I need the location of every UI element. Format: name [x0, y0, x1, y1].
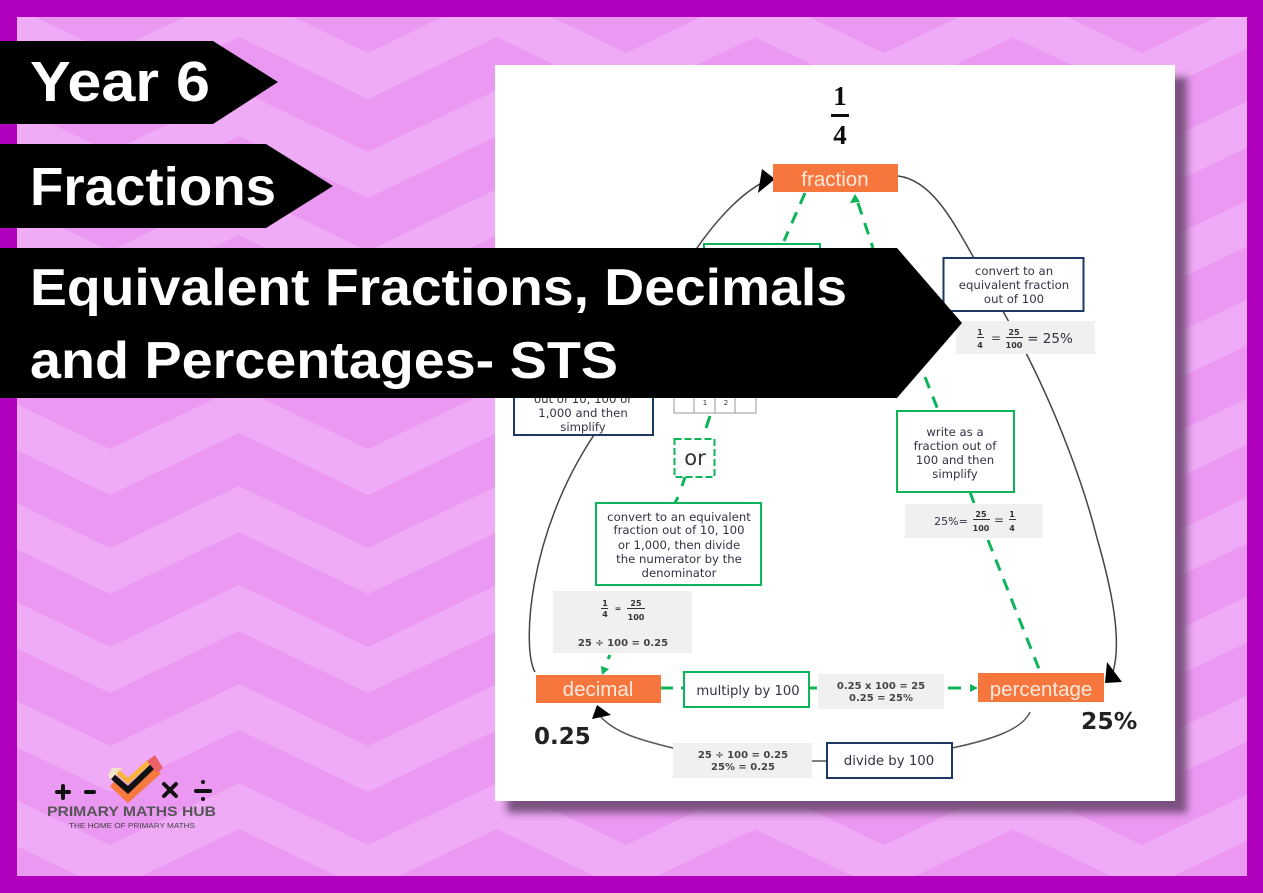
navy box: convert to equivalent fraction out of 100: out of 100	[984, 292, 1044, 306]
fraction one quarter	[831, 81, 849, 150]
green box: convert then divide: denominator	[642, 566, 717, 580]
green box: write as a fraction out of 100: simplify	[932, 467, 978, 481]
grey working: percentage to fraction: 25	[975, 510, 987, 519]
logo: Primary Maths Hub	[47, 755, 216, 830]
navy box: convert to equivalent fraction out of 10, 100 or 1,000	[514, 370, 653, 435]
banner: main title	[0, 248, 962, 398]
partly hidden green box	[704, 244, 820, 264]
grey working: fraction to decimal: 4	[602, 610, 608, 619]
icon: plus minus times divide	[57, 780, 210, 801]
small place value table: 1	[703, 399, 707, 407]
green box: write as a fraction out of 100: fraction out of	[914, 439, 997, 453]
grey working: percentage to decimal	[673, 743, 812, 778]
node: decimal: decimal	[563, 678, 633, 701]
grey working: decimal to percentage: 0.25 x 100 = 25	[837, 681, 925, 692]
navy box: convert to equivalent fraction out of 100: convert to an	[975, 264, 1053, 278]
navy box: convert to equivalent fraction out of 10, 100 or 1,000: simplify	[560, 420, 606, 434]
dashed box: or: or	[684, 446, 706, 470]
grey working: decimal to percentage	[818, 674, 944, 709]
banner: main title: Equivalent Fractions, Decimals	[30, 259, 847, 317]
grey working: fraction to percentage: 25	[1008, 328, 1020, 337]
grey working: percentage to fraction	[905, 504, 1043, 538]
node: decimal	[536, 675, 661, 703]
curved arrow: percentage to decimal	[592, 705, 1030, 761]
banner: Year 6	[0, 41, 278, 124]
fraction one quarter: 4	[833, 120, 847, 150]
grey working: fraction to percentage: 100	[1006, 341, 1023, 350]
banner: Year 6: Year 6	[30, 50, 210, 114]
grey working: decimal to percentage: 0.25 = 25%	[849, 693, 913, 704]
grey working: fraction to percentage: 4	[977, 341, 983, 350]
value: 25%: 25%	[1081, 707, 1137, 735]
green box: convert then divide: the numerator by the	[616, 552, 742, 566]
grey working: fraction to percentage: = 25%	[1027, 331, 1073, 347]
grey working: fraction to percentage: =	[991, 331, 1001, 345]
grey working: percentage to fraction: 100	[973, 524, 990, 533]
node: fraction	[773, 164, 898, 192]
grey working: fraction to decimal: 25 ÷ 100 = 0.25	[578, 638, 668, 649]
grey working: fraction to decimal: 25	[630, 599, 642, 608]
grey working: percentage to decimal: 25% = 0.25	[711, 762, 775, 773]
grey working: percentage to fraction: =	[994, 513, 1004, 527]
navy box: convert to equivalent fraction out of 10, 100 or 1,000: 1,000 and then	[538, 406, 628, 420]
green box: convert then divide: convert to an equivalent	[607, 510, 751, 524]
grey working: percentage to decimal: 25 ÷ 100 = 0.25	[698, 750, 788, 761]
grey working: fraction to decimal: 1	[602, 599, 608, 608]
green box: convert then divide: fraction out of 10, 100	[613, 523, 745, 537]
small place value table	[674, 395, 756, 413]
logo tagline: THE HOME OF PRIMARY MATHS	[69, 821, 195, 830]
green box: write as a fraction out of 100: 100 and then	[916, 453, 994, 467]
node: percentage: percentage	[990, 678, 1092, 701]
node: percentage	[978, 673, 1104, 702]
navy box: divide by 100: divide by 100	[844, 754, 934, 769]
green box: convert then divide	[596, 503, 761, 585]
green box: multiply by 100: multiply by 100	[696, 684, 800, 699]
small place value table: 2	[724, 399, 728, 407]
grey working: fraction to decimal: =	[615, 604, 621, 613]
logo wordmark: PRIMARY MATHS HUB	[47, 804, 216, 819]
green box: multiply by 100	[684, 672, 809, 707]
green dashed arrows	[601, 193, 1041, 692]
fraction one quarter: 1	[833, 81, 847, 111]
green box: write as a fraction out of 100	[897, 411, 1014, 492]
grey working: percentage to fraction: 25%=	[934, 515, 968, 528]
banner: Fractions: Fractions	[30, 157, 276, 217]
green box: write as a fraction out of 100: write as a	[926, 425, 984, 439]
banner: Fractions	[0, 144, 333, 228]
grey working: percentage to fraction: 1	[1009, 510, 1015, 519]
banner: main title: and Percentages- STS	[30, 332, 618, 390]
grey working: fraction to percentage	[956, 321, 1095, 354]
grey working: fraction to decimal	[553, 591, 692, 653]
icon: pencil tick	[108, 755, 163, 797]
dashed box: or	[674, 439, 714, 477]
node: fraction: fraction	[801, 168, 869, 191]
navy box: convert to equivalent fraction out of 100: equivalent fraction	[959, 278, 1069, 292]
card shadow	[507, 77, 1187, 813]
green box: convert then divide: or 1,000, then divide	[618, 538, 740, 552]
navy box: divide by 100	[827, 743, 952, 778]
grey working: fraction to percentage: 1	[977, 328, 983, 337]
grey working: percentage to fraction: 4	[1009, 524, 1015, 533]
curved arrow: fraction to percentage	[898, 176, 1122, 683]
grey working: fraction to decimal: 100	[628, 613, 645, 622]
navy box: convert to equivalent fraction out of 100	[944, 258, 1084, 311]
navy box: convert to equivalent fraction out of 10, 100 or 1,000: out of 10, 100 or	[534, 392, 632, 406]
value: 0.25: 0.25	[534, 724, 591, 750]
panel: conversion diagram	[495, 65, 1175, 801]
curved arrow: decimal to fraction	[529, 169, 775, 672]
